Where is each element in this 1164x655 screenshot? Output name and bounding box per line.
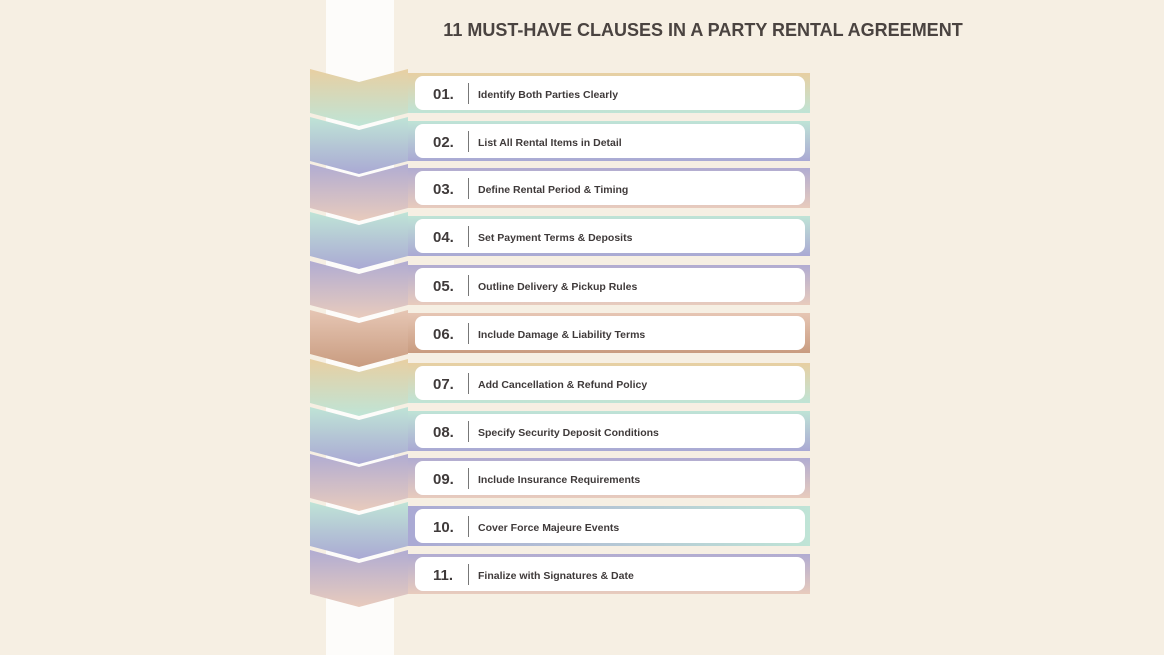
row 06 xyxy=(408,313,810,353)
row 01: 01. xyxy=(433,86,454,103)
row 10 xyxy=(408,506,810,546)
row 08: Specify Security Deposit Conditions xyxy=(478,427,659,439)
row 03: 03. xyxy=(433,181,454,198)
row 04 xyxy=(408,216,810,256)
row 08 xyxy=(408,411,810,451)
row 03: Define Rental Period & Timing xyxy=(478,184,628,196)
row 08: 08. xyxy=(433,424,454,441)
row 02: List All Rental Items in Detail xyxy=(478,137,622,149)
row 07 xyxy=(408,363,810,403)
row 01: Identify Both Parties Clearly xyxy=(478,89,618,101)
row 10: Cover Force Majeure Events xyxy=(478,522,619,534)
row 02: 02. xyxy=(433,134,454,151)
row 11: 11. xyxy=(433,567,453,584)
row 01 xyxy=(408,73,810,113)
row 05: 05. xyxy=(433,278,454,295)
row 06: 06. xyxy=(433,326,454,343)
row 02 xyxy=(408,121,810,161)
row 11 xyxy=(408,554,810,594)
row 09: 09. xyxy=(433,471,454,488)
row 04: 04. xyxy=(433,229,454,246)
row 05 xyxy=(408,265,810,305)
row 04: Set Payment Terms & Deposits xyxy=(478,232,632,244)
title: 11 MUST-HAVE CLAUSES IN A PARTY RENTAL AGREEMENT xyxy=(443,20,963,40)
row 09: Include Insurance Requirements xyxy=(478,474,640,486)
row 09 xyxy=(408,458,810,498)
row 10: 10. xyxy=(433,519,454,536)
row 07: 07. xyxy=(433,376,454,393)
row 03 xyxy=(408,168,810,208)
row 06: Include Damage & Liability Terms xyxy=(478,329,645,341)
row 05: Outline Delivery & Pickup Rules xyxy=(478,281,637,293)
row 07: Add Cancellation & Refund Policy xyxy=(478,379,647,391)
row 11: Finalize with Signatures & Date xyxy=(478,570,634,582)
